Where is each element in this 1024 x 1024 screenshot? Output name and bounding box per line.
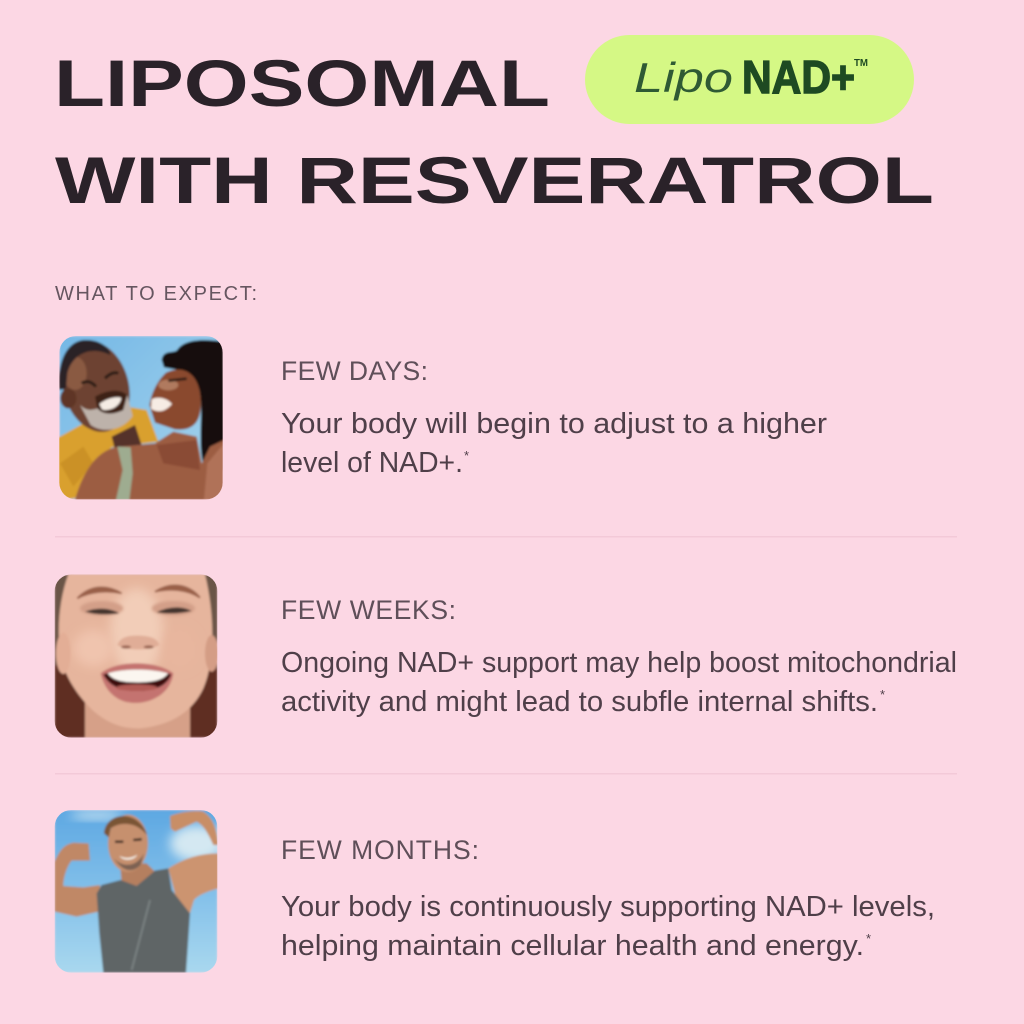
- text: few days: [281, 356, 828, 479]
- title: WITH RESVERATROL: [55, 143, 934, 217]
- title: [54, 46, 934, 217]
- text: few days: Your body will begin to adjust to a higher: [281, 408, 828, 440]
- man's head: [62, 346, 132, 433]
- nose: [117, 636, 159, 649]
- head: [108, 815, 148, 872]
- text: few weeks: activity and might lead to subfle internal shifts.: [281, 686, 878, 718]
- face: [59, 574, 212, 728]
- badge: LipoNAD+: [585, 35, 914, 124]
- text: few days: FEW DAYS:: [281, 356, 428, 386]
- man's beard: [80, 395, 133, 430]
- text: few months: FEW MONTHS:: [281, 835, 479, 865]
- text: few months: [281, 835, 935, 962]
- woman's hair: [162, 340, 225, 470]
- eyebrows: [77, 587, 122, 598]
- badge: LipoNAD+: TM: [854, 58, 868, 69]
- left arm: [55, 843, 100, 917]
- man's shirt: [57, 407, 158, 500]
- woman's body: [75, 432, 224, 500]
- text: few weeks: FEW WEEKS:: [281, 595, 456, 625]
- photo: smiling woman: [55, 574, 218, 738]
- eyes: [85, 609, 119, 614]
- tank strap: [116, 447, 133, 500]
- text: few days: *: [464, 448, 469, 463]
- photo: laughing couple: [53, 334, 225, 500]
- woman's face: [149, 370, 201, 430]
- text: few months: helping maintain cellular health and energy.: [281, 930, 864, 962]
- text: few weeks: Ongoing NAD+ support may help boost mitochondrial: [281, 647, 957, 679]
- badge: LipoNAD+: NAD+: [742, 51, 855, 103]
- neck: [120, 863, 155, 886]
- text: few weeks: *: [880, 687, 885, 702]
- badge: LipoNAD+: Lipo: [634, 54, 733, 101]
- divider: [55, 773, 957, 774]
- neck: [85, 698, 190, 738]
- ears: [56, 633, 71, 674]
- subheading: what to expect: WHAT TO EXPECT:: [55, 283, 257, 305]
- text: few weeks: [281, 595, 957, 718]
- text: few months: Your body is continuously supporting NAD+ levels,: [281, 891, 935, 923]
- right arm: [168, 853, 218, 913]
- tank top: [97, 868, 190, 973]
- text: few months: *: [866, 931, 871, 946]
- divider: [55, 536, 957, 538]
- eye shadows: [80, 601, 123, 616]
- text: few days: level of NAD+.: [281, 447, 463, 479]
- title: LIPOSOMAL: [54, 46, 550, 120]
- smile: [101, 663, 173, 703]
- photo: man flexing: [55, 810, 223, 973]
